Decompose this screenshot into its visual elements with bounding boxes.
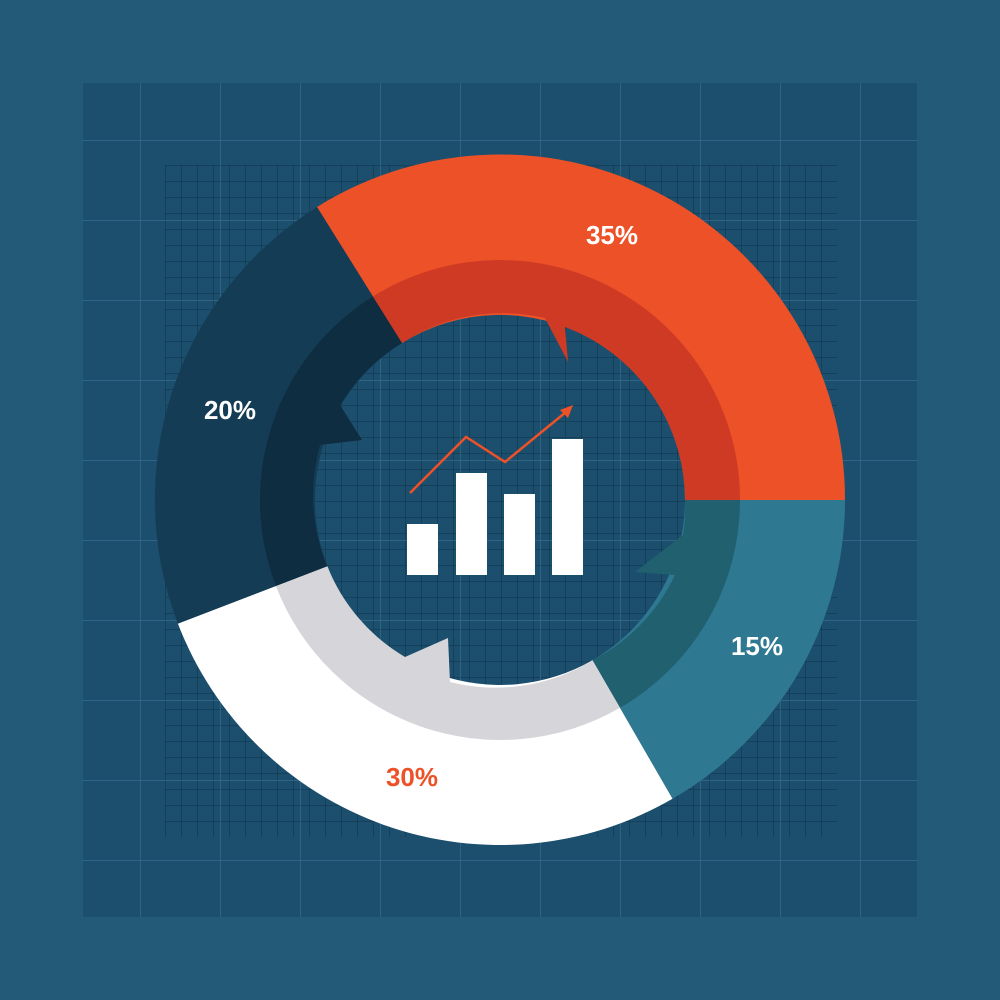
- inner band: teal: [592, 500, 740, 708]
- inner band: orange: [373, 260, 740, 500]
- segment: white 30%: [178, 566, 672, 845]
- icon: bar chart with trend arrow: [407, 405, 583, 575]
- label: 35%: 35%: [586, 220, 638, 250]
- inner band: white: [276, 566, 620, 740]
- label: 20%: 20%: [204, 395, 256, 425]
- segment: orange 35%: [317, 154, 845, 500]
- panel: grid background: [83, 83, 917, 917]
- label: 30%: 30%: [386, 762, 438, 792]
- donut chart: [155, 154, 845, 845]
- inner band: navy: [260, 296, 402, 586]
- segment: teal 15%: [592, 500, 845, 799]
- segment: navy 20%: [155, 207, 402, 624]
- label: 15%: 15%: [731, 631, 783, 661]
